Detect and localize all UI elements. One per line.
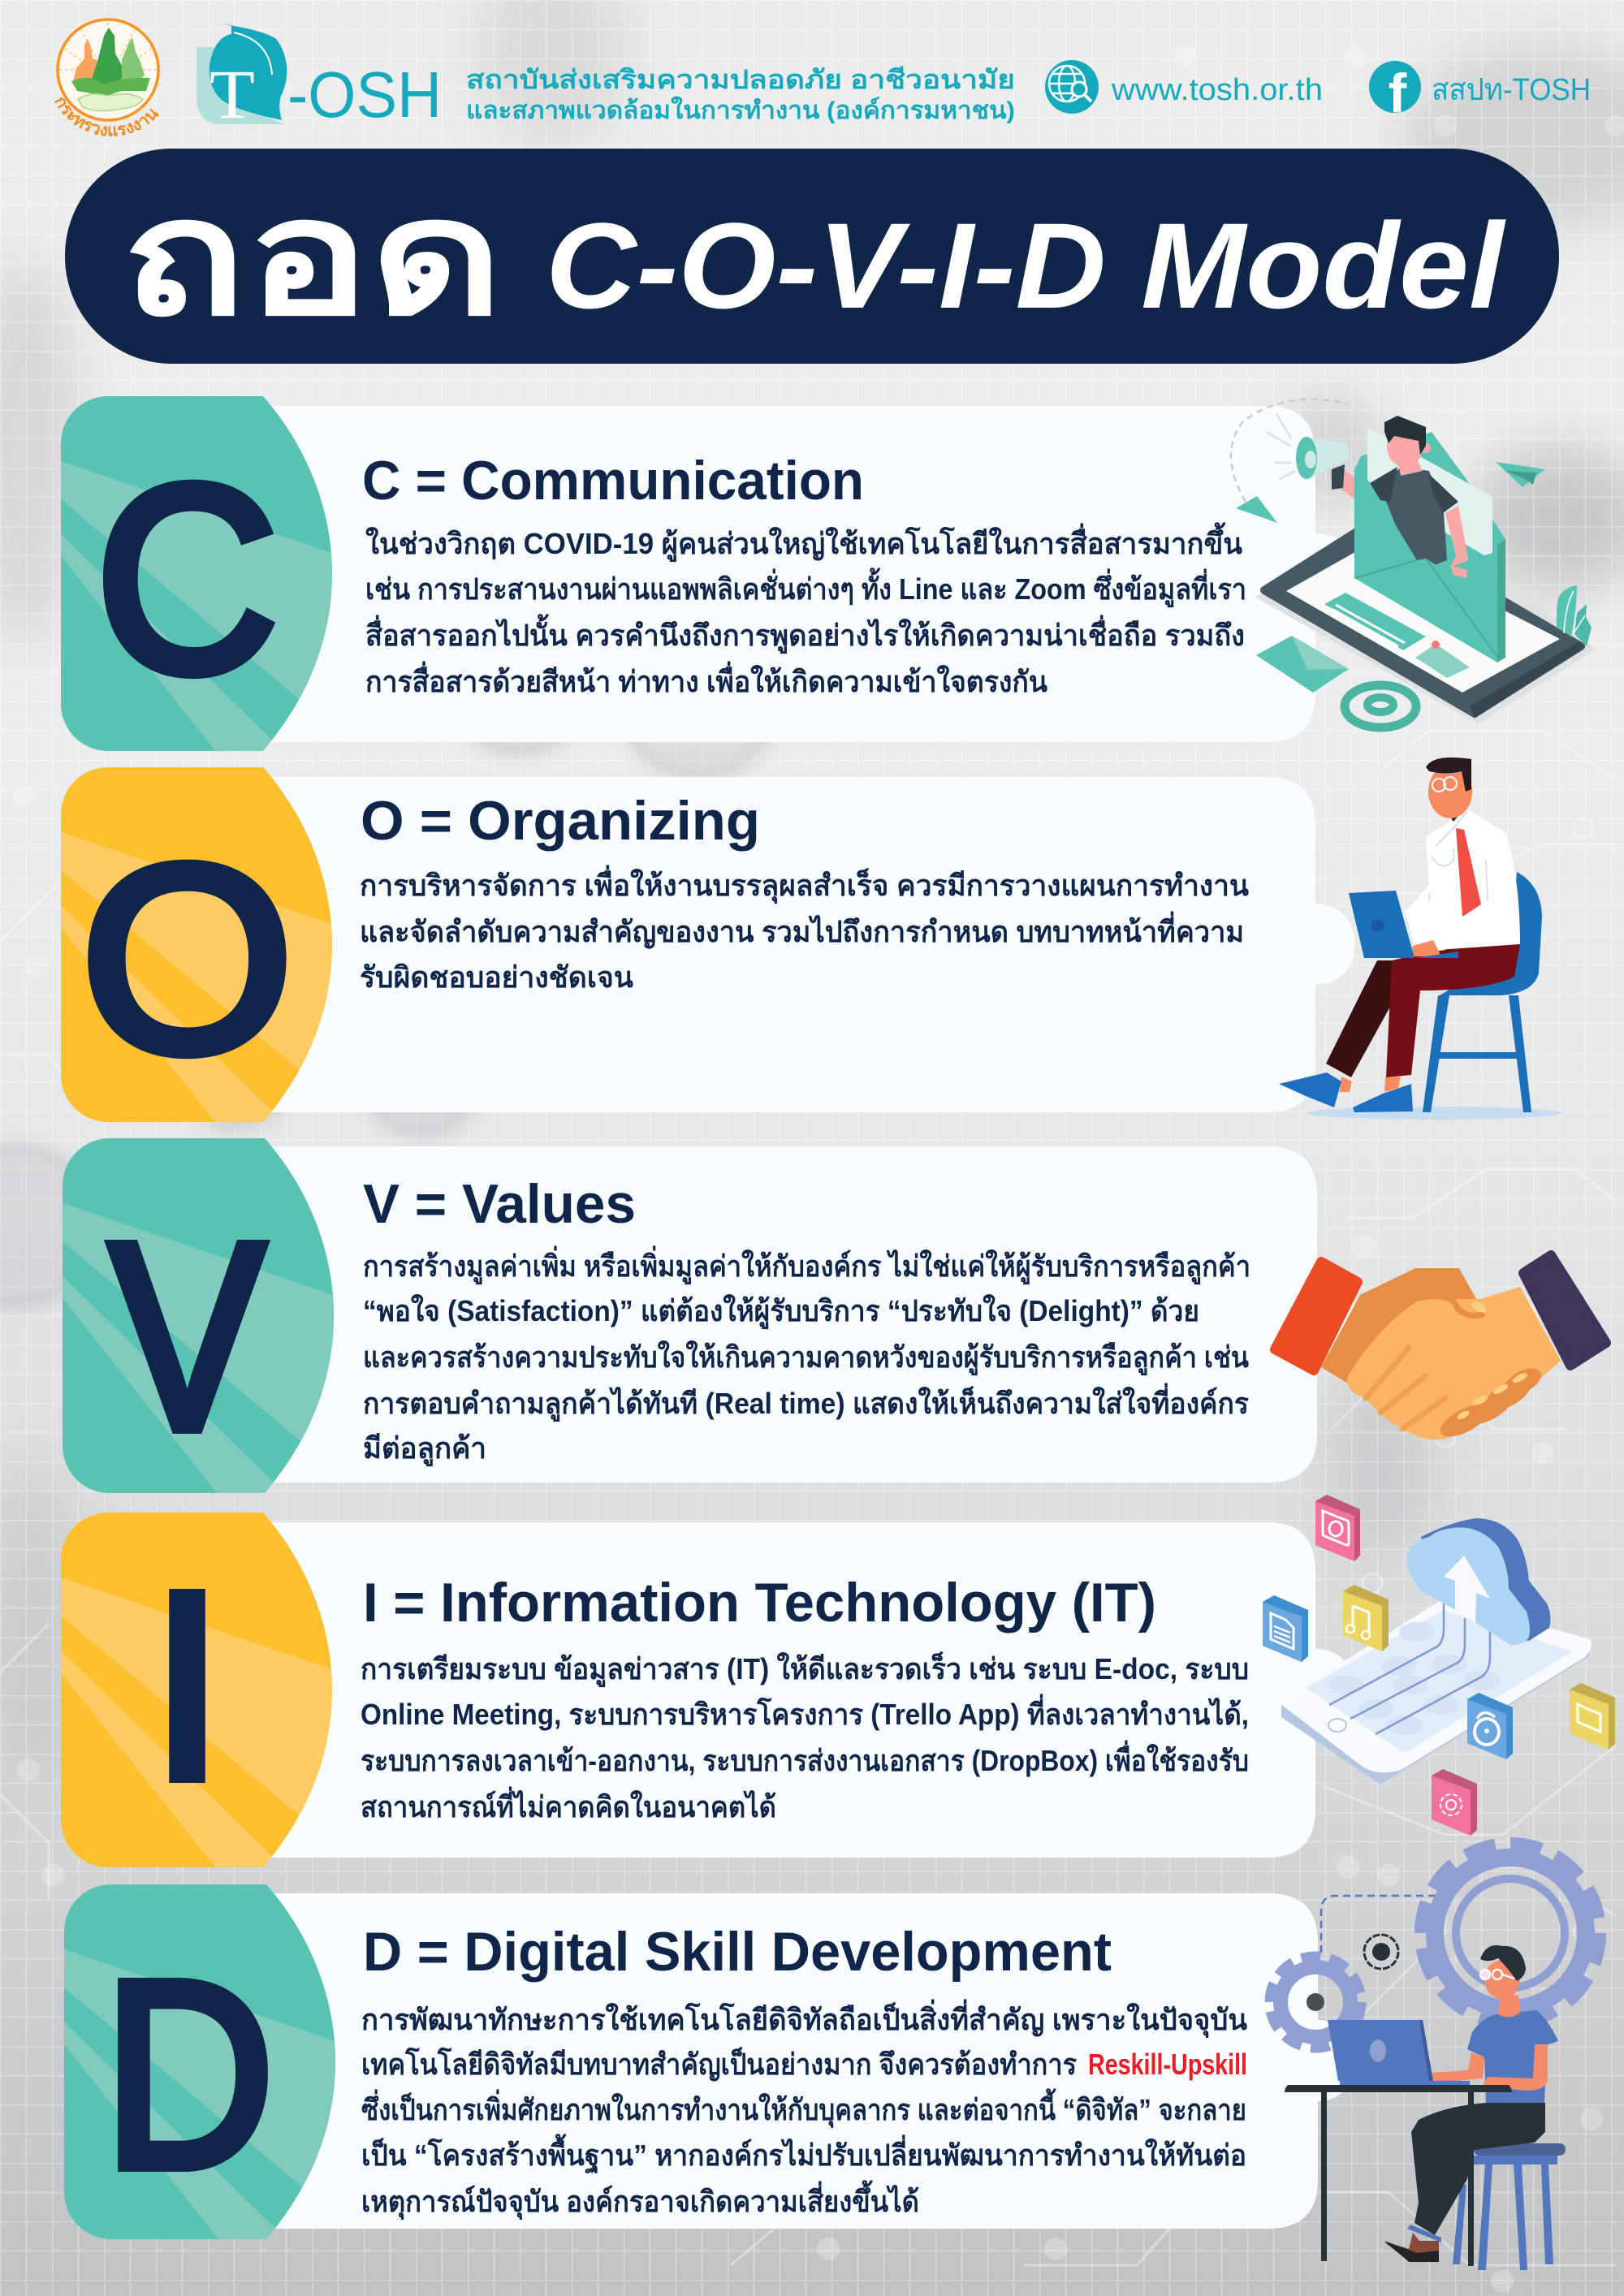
- paper planes: [1496, 462, 1545, 487]
- cuff: red: [1275, 1262, 1358, 1370]
- icon: folder: [1570, 1683, 1615, 1750]
- text: website: www.tosh.or.th: [1111, 73, 1323, 107]
- letter badge D: D: [103, 1926, 274, 2223]
- body text: รับผิดชอบอย่างชัดเจน: [360, 960, 633, 994]
- shirt: [1467, 2010, 1558, 2103]
- illustration: phone and cloud with app icons: [1263, 1495, 1615, 1836]
- arm and laptop: [1406, 897, 1445, 954]
- plant: [1557, 585, 1592, 646]
- icon: gear: [1432, 1769, 1477, 1836]
- letter badge O: O: [81, 811, 293, 1107]
- text: institute name: [466, 65, 1015, 124]
- body text: Reskill-Upskill: [1088, 2048, 1247, 2081]
- header logos: [54, 18, 1591, 136]
- text: institute name: สถาบันส่งเสริมความปลอดภัย อาชีวอนามัย: [466, 65, 1015, 94]
- body text: ในช่วงวิกฤต COVID-19 ผู้คนส่วนใหญ่ใช้เทคโนโลยีในการสื่อสารมากขึ้น: [365, 522, 1242, 563]
- desk: [1285, 2085, 1512, 2261]
- desk leg back: [1468, 2092, 1474, 2266]
- text: seal caption: กระทรวงแรงงาน: [54, 97, 159, 136]
- letter badge V: [63, 1138, 355, 1498]
- body text: Online Meeting, ระบบการบริหารโครงการ (Trello App) ที่ลงเวลาทำงานได้,: [361, 1694, 1249, 1731]
- stool: [1453, 2143, 1566, 2270]
- letter badge C: [61, 396, 353, 756]
- body text: [361, 1651, 1249, 1823]
- letter badge D: [64, 1884, 356, 2244]
- body text: เทคโนโลยีดิจิทัลมีบทบาทสำคัญเป็นอย่างมาก จึงควรต้องทำการ: [361, 2046, 1078, 2082]
- body text: เหตุการณ์ปัจจุบัน องค์กรอาจเกิดความเสี่ยงขึ้นได้: [361, 2180, 919, 2220]
- heading: V = Values: [363, 1173, 636, 1235]
- small envelope: [1256, 636, 1349, 693]
- panel: V Values: [63, 1138, 1355, 1498]
- logo: ministry seal: [54, 18, 160, 136]
- head: [1426, 757, 1472, 822]
- back leg: [1326, 960, 1397, 1077]
- phone: [1281, 1599, 1590, 1785]
- icon: lock: [1467, 1693, 1513, 1759]
- illustration: envelope on tablet with megaphone: [1231, 399, 1596, 727]
- shoes: [1384, 2225, 1441, 2262]
- title banner: [65, 149, 1559, 364]
- title: model name: C-O-V-I-D Model: [546, 197, 1506, 334]
- cloud: [1407, 1518, 1550, 1645]
- large gear: [1423, 1845, 1598, 2021]
- body text: และควรสร้างความประทับใจให้เกินความคาดหวังของผู้รับบริการหรือลูกค้า เช่น: [363, 1340, 1249, 1376]
- heading: D = Digital Skill Development: [363, 1921, 1112, 1983]
- body text: การเตรียมระบบ ข้อมูลข่าวสาร (IT) ให้ดีและรวดเร็ว เช่น ระบบ E-doc, ระบบ: [361, 1651, 1249, 1688]
- small gear: [1269, 1956, 1362, 2048]
- body text: [363, 1245, 1250, 1467]
- body text: ซึ่งเป็นการเพิ่มศักยภาพในการทำงานให้กับบุคลากร และต่อจากนี้ “ดิจิทัล” จะกลาย: [361, 2088, 1246, 2129]
- panel: I Information Technology: [61, 1513, 1355, 1872]
- body text: [360, 865, 1249, 994]
- illustration: handshake: [1275, 1255, 1606, 1443]
- logo: T-OSH: [197, 23, 442, 133]
- icon: globe: [1045, 60, 1099, 114]
- arms: [1432, 2052, 1484, 2083]
- tiny gear: [1364, 1935, 1398, 1969]
- envelope front: [1354, 469, 1497, 662]
- icon: facebook: [1369, 61, 1421, 124]
- letter badge C: C: [96, 430, 278, 727]
- text card: [244, 406, 1355, 742]
- body text: เช่น การประสานงานผ่านแอพพลิเคชั่นต่างๆ ทั้ง Line และ Zoom ซึ่งข้อมูลที่เรา: [365, 568, 1246, 608]
- cuff: navy: [1523, 1255, 1606, 1366]
- envelope back: [1354, 432, 1505, 581]
- arrow: [1444, 1556, 1490, 1624]
- heading: O = Organizing: [361, 790, 760, 852]
- body text: เป็น “โครงสร้างพื้นฐาน” หากองค์กรไม่ปรับเปลี่ยนพัฒนาการทำงานให้ทันต่อ: [361, 2134, 1246, 2174]
- body text: การบริหารจัดการ เพื่อให้งานบรรลุผลสำเร็จ ควรมีการวางแผนการทำงาน: [360, 865, 1249, 904]
- body text: และจัดลำดับความสำคัญของงาน รวมไปถึงการกำหนด บทบาทหน้าที่ความ: [360, 911, 1244, 949]
- illustration: person at laptop with gears: [1269, 1845, 1598, 2270]
- body text: สถานการณ์ที่ไม่คาดคิดในอนาคตได้: [361, 1786, 776, 1823]
- icon: music: [1343, 1585, 1389, 1651]
- dashed connector: [1321, 1896, 1435, 1953]
- icon: camera: [1315, 1495, 1360, 1561]
- text card: [244, 1522, 1355, 1858]
- illustration: man with laptop on chair: [1279, 757, 1561, 1120]
- text card: [244, 1893, 1356, 2229]
- body text: การสื่อสารด้วยสีหน้า ท่าทาง เพื่อให้เกิดความเข้าใจตรงกัน: [365, 661, 1047, 698]
- body text: “พอใจ (Satisfaction)” แต่ต้องให้ผู้รับบริการ “ประทับใจ (Delight)” ด้วย: [363, 1293, 1199, 1330]
- laptop: [1328, 2020, 1470, 2085]
- panel: O Organizing: [61, 767, 1355, 1127]
- letter badge V: V: [110, 1188, 266, 1484]
- logo: T-OSH: T: [209, 55, 255, 133]
- body text: การสร้างมูลค่าเพิ่ม หรือเพิ่มมูลค่าให้กับองค์กร ไม่ใช่แค่ให้ผู้รับบริการหรือลูกค้า: [363, 1245, 1250, 1285]
- app icons: [1263, 1495, 1615, 1836]
- panel: C Communication: [61, 396, 1355, 756]
- shirt: [1406, 809, 1520, 954]
- body text: การตอบคำถามลูกค้าได้ทันที (Real time) แสดงให้เห็นถึงความใส่ใจที่องค์กร: [363, 1383, 1250, 1422]
- body text: [365, 522, 1246, 698]
- icon: document: [1263, 1595, 1308, 1662]
- text: facebook page: สสปท-TOSH: [1432, 73, 1591, 107]
- body text: ระบบการลงเวลาเข้า-ออกงาน, ระบบการส่งงานเอกสาร (DropBox) เพื่อใช้รองรับ: [361, 1740, 1249, 1777]
- letter badge I: [61, 1513, 353, 1872]
- title: Thai word: ถอด: [122, 167, 503, 348]
- chair: [1423, 872, 1542, 1112]
- head: [1480, 1945, 1526, 2018]
- panel: D Digital Skill Development: [64, 1884, 1356, 2244]
- tie: [1456, 828, 1481, 917]
- logo: T-OSH: -OSH: [287, 58, 442, 131]
- megaphone: [1267, 414, 1351, 490]
- body text: การพัฒนาทักษะการใช้เทคโนโลยีดิจิทัลถือเป็นสิ่งที่สำคัญ เพราะในปัจจุบัน: [361, 1999, 1247, 2039]
- pants: [1411, 2103, 1545, 2235]
- body text: [361, 1999, 1247, 2220]
- heading: C = Communication: [362, 450, 864, 511]
- text card: [244, 1146, 1355, 1482]
- text: institute name: และสภาพแวดล้อมในการทำงาน (องค์การมหาชน): [466, 96, 1015, 124]
- letter badge O: [61, 767, 353, 1127]
- at sign: [1345, 685, 1416, 727]
- shoes: [1340, 1077, 1401, 1092]
- icon: facebook: f: [1389, 63, 1407, 124]
- heading: I = Information Technology (IT): [363, 1572, 1156, 1634]
- text card: [244, 777, 1355, 1112]
- body text: มีต่อลูกค้า: [363, 1431, 486, 1467]
- person: [1330, 416, 1468, 576]
- pants: [1386, 944, 1520, 1077]
- letter badge I: I: [150, 1538, 224, 1834]
- body text: สื่อสารออกไปนั้น ควรคำนึงถึงการพูดอย่างไรให้เกิดความน่าเชื่อถือ รวมถึง: [365, 614, 1245, 654]
